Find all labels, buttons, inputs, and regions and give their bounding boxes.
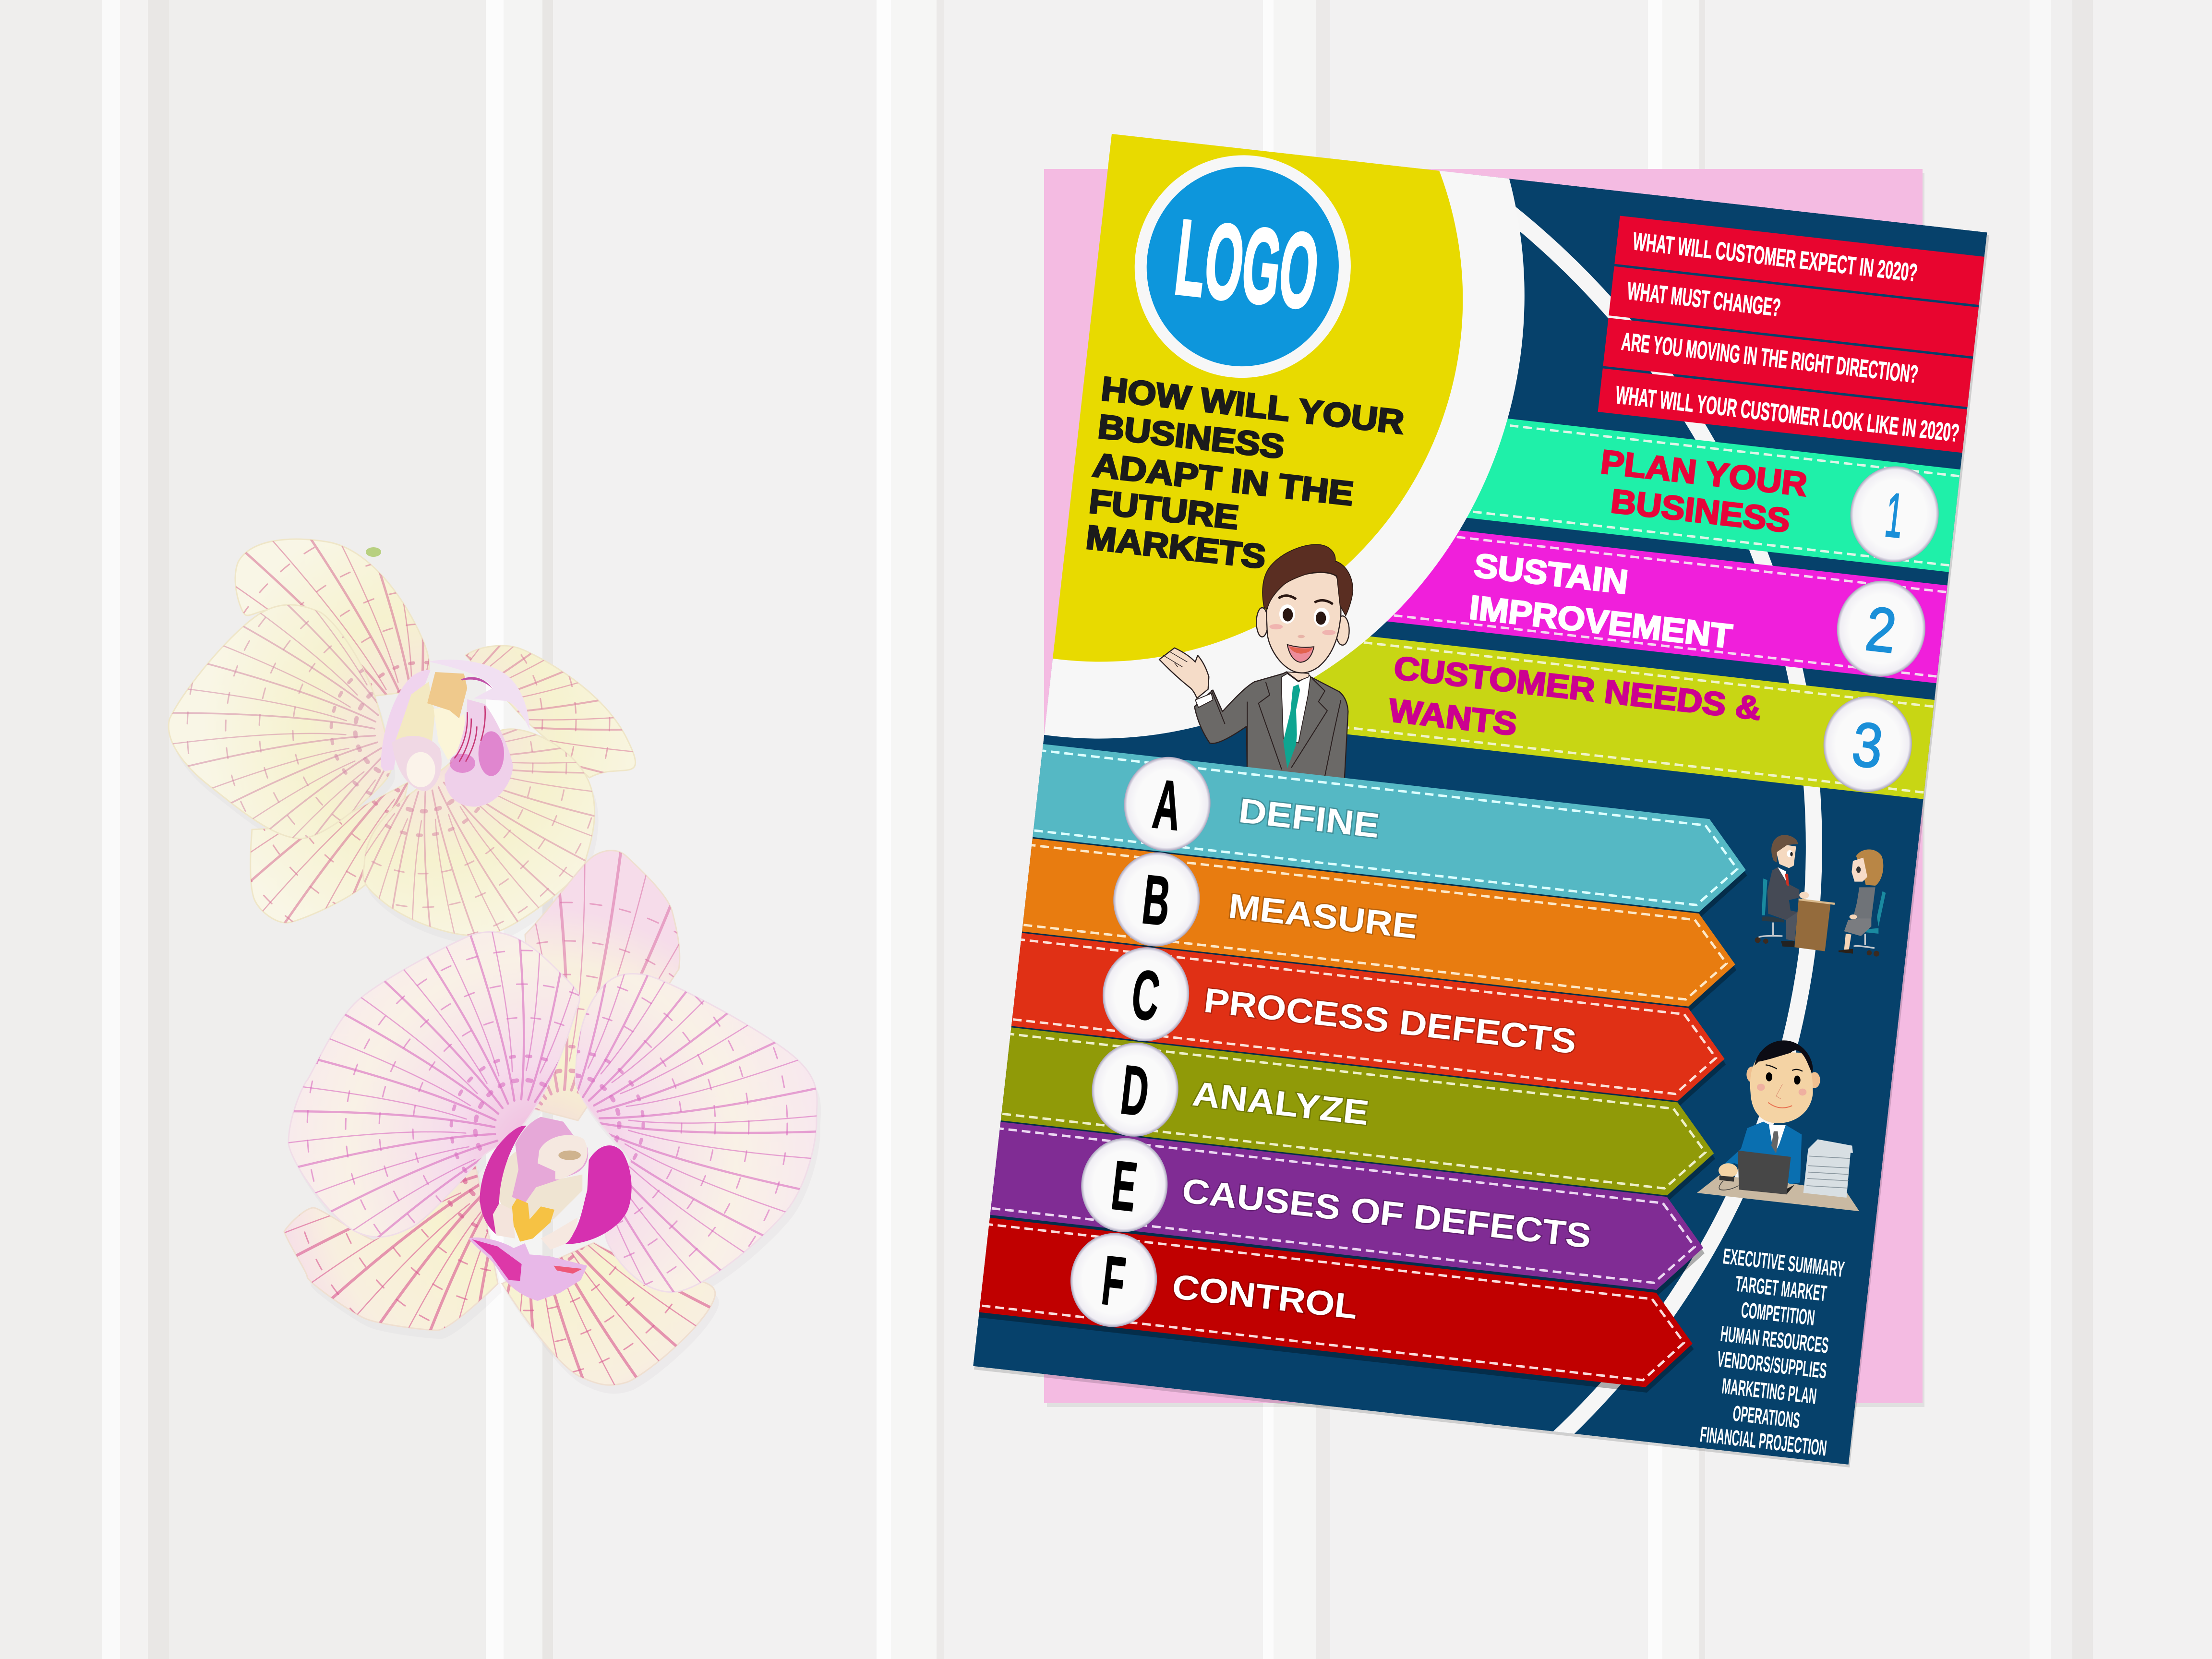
list: business plan contents: FINANCIAL PROJECTION xyxy=(1699,1421,1828,1461)
arrow band D: analyze xyxy=(996,1027,1721,1205)
label: customer needs and wants: WANTS xyxy=(1387,692,1519,743)
title xyxy=(1082,370,1406,589)
badge F xyxy=(1066,1228,1162,1332)
arrow band F: control xyxy=(974,1217,1700,1397)
title: HOW WILL YOUR xyxy=(1099,370,1406,441)
badge A xyxy=(1119,752,1215,855)
arrow band B: measure: MEASURE xyxy=(1226,887,1420,946)
question 4 xyxy=(1598,368,1970,453)
arrow band A: define: DEFINE xyxy=(1237,792,1382,845)
arrow band E: causes of defects xyxy=(985,1121,1710,1300)
logo badge xyxy=(1123,144,1362,389)
illustration: man with laptop and papers xyxy=(1697,1040,1859,1211)
poster background xyxy=(973,134,1987,1465)
badge 2 xyxy=(1832,576,1930,681)
question 2 xyxy=(1609,266,1982,357)
title: FUTURE xyxy=(1087,482,1241,536)
badge A: A xyxy=(1150,765,1185,845)
arrow band C: process defects xyxy=(1006,932,1731,1111)
question 3: ARE YOU MOVING IN THE RIGHT DIRECTION? xyxy=(1620,328,1920,389)
badge E xyxy=(1076,1133,1173,1237)
orchid: upper flower xyxy=(168,539,816,1299)
label: sustain improvement: IMPROVEMENT xyxy=(1467,589,1734,655)
character: presenter businessman xyxy=(1159,544,1353,786)
title: BUSINESS xyxy=(1096,408,1286,466)
label: sustain improvement: SUSTAIN xyxy=(1472,546,1630,601)
badge B xyxy=(1108,848,1205,951)
arrow band A: define xyxy=(1027,744,1753,922)
panel: questions xyxy=(1598,216,1987,453)
list: business plan contents: EXECUTIVE SUMMARY xyxy=(1722,1243,1846,1282)
list: business plan contents: VENDORS/SUPPLIES xyxy=(1716,1346,1828,1383)
illustration: two people at desk xyxy=(1755,835,1886,957)
arrow band E: causes of defects: CAUSES OF DEFECTS xyxy=(1180,1171,1593,1256)
flower shadows xyxy=(172,613,821,1394)
arrow band F: control: CONTROL xyxy=(1170,1267,1359,1326)
badge E: E xyxy=(1108,1146,1141,1226)
label: customer needs and wants: CUSTOMER NEEDS & xyxy=(1392,649,1763,727)
pink backing card xyxy=(1044,169,1924,1407)
badge D: D xyxy=(1118,1050,1153,1131)
question 1 xyxy=(1614,216,1987,305)
list: business plan contents: MARKETING PLAN xyxy=(1720,1373,1818,1409)
list: business plan contents: OPERATIONS xyxy=(1731,1401,1801,1433)
label: plan your business: BUSINESS xyxy=(1609,482,1792,540)
question 2: WHAT MUST CHANGE? xyxy=(1626,277,1782,322)
poster xyxy=(973,134,1987,1465)
label: sustain improvement xyxy=(1467,546,1739,655)
arrow band B: measure xyxy=(1017,838,1743,1017)
orchid: lower flower xyxy=(283,850,818,1386)
white ring around yellow circle xyxy=(635,0,1571,783)
title: ADAPT IN THE xyxy=(1091,446,1356,513)
label: plan your business xyxy=(1595,443,1809,541)
list: business plan contents: COMPETITION xyxy=(1740,1297,1816,1330)
band 1 background xyxy=(1312,398,1963,572)
badge 1: 1 xyxy=(1882,480,1907,551)
list: business plan contents: TARGET MARKET xyxy=(1734,1271,1828,1306)
badge B: B xyxy=(1139,860,1174,940)
list: business plan contents: HUMAN RESOURCES xyxy=(1719,1321,1830,1358)
arrow band C: process defects: PROCESS DEFECTS xyxy=(1202,981,1578,1061)
badge 2: 2 xyxy=(1863,593,1900,666)
yellow circle xyxy=(700,0,1501,700)
poster shadow xyxy=(974,138,1989,1467)
logo badge: LOGO xyxy=(1170,198,1324,332)
list: business plan contents xyxy=(1699,1243,1848,1461)
band 2 background xyxy=(1299,514,1950,684)
upper flower centre xyxy=(381,660,529,807)
question 1: WHAT WILL CUSTOMER EXPECT IN 2020? xyxy=(1632,228,1919,287)
badge C xyxy=(1098,943,1194,1046)
title: MARKETS xyxy=(1084,518,1268,576)
question 3 xyxy=(1603,318,1976,408)
label: customer needs and wants xyxy=(1387,649,1763,769)
badge 3 xyxy=(1818,691,1917,797)
lower flower centre xyxy=(469,1117,632,1301)
arrow band D: analyze: ANALYZE xyxy=(1190,1075,1371,1132)
badge D xyxy=(1087,1038,1183,1141)
badge 3: 3 xyxy=(1849,709,1886,781)
label: plan your business: PLAN YOUR xyxy=(1599,443,1809,503)
badge C: C xyxy=(1128,955,1164,1035)
badge 1 xyxy=(1845,462,1944,567)
badge F: F xyxy=(1098,1241,1129,1321)
band 3 background xyxy=(1286,628,1937,799)
white sweeping arc xyxy=(1439,171,1822,1434)
